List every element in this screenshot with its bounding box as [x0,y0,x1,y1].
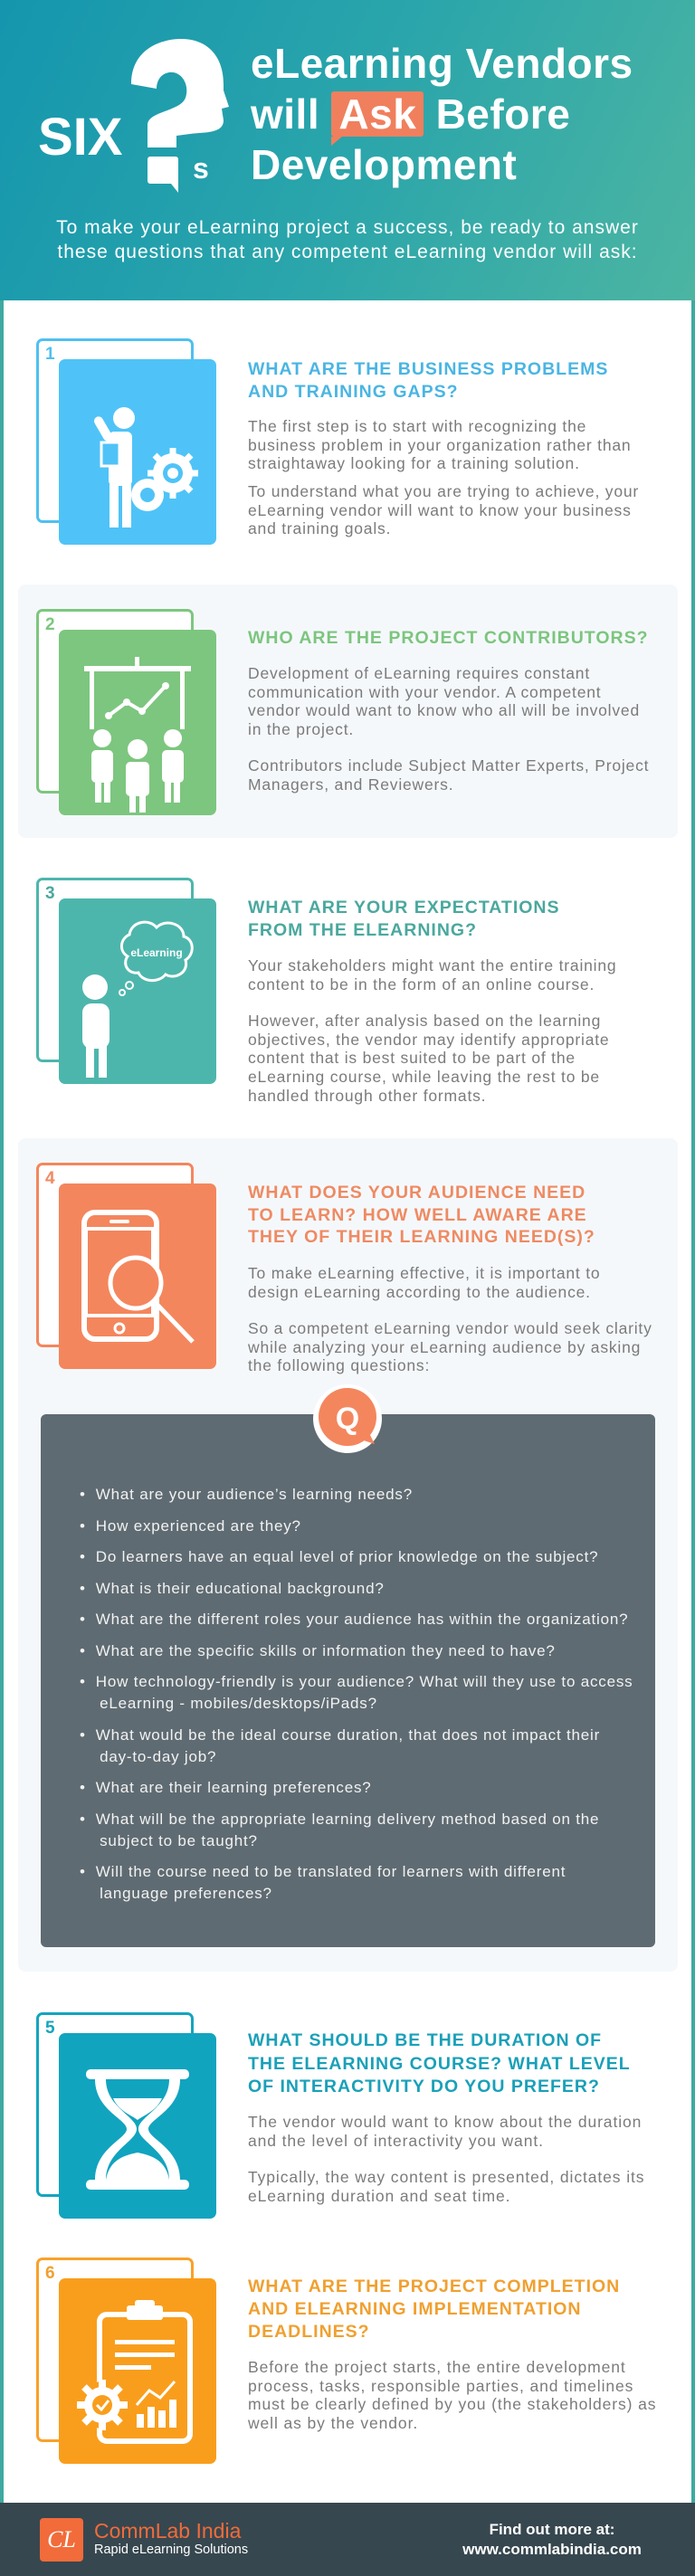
subtitle: these questions that any competent eLearning vendor will ask: [57,242,638,262]
body 2: Contributors include Subject Matter Experts, Project [248,756,649,775]
icon: person with gears [59,359,216,545]
heading 6: AND ELEARNING IMPLEMENTATION [248,2299,582,2319]
question list: day-to-day job? [100,1748,216,1764]
title text: Ask [338,90,416,138]
brand name: CommLab India [94,2519,241,2543]
panel: section 5 [36,2012,644,2219]
heading 3: WHAT ARE YOUR EXPECTATIONS [248,898,560,917]
question list: • What is their educational background? [80,1580,385,1596]
logo: CL: CL [47,2526,76,2552]
body 2: Managers, and Reviewers. [248,775,453,794]
heading 1: AND TRAINING GAPS? [248,382,458,402]
heading 6: DEADLINES? [248,2322,370,2342]
body 4: design eLearning according to the audience. [248,1283,591,1301]
heading 6: WHAT ARE THE PROJECT COMPLETION [248,2277,620,2296]
card outline 5 [36,2012,194,2197]
body 4: while analyzing your eLearning audience by asking [248,1338,641,1356]
body 3: eLearning course, while leaving the rest to be [248,1068,600,1086]
question list: • Will the course need to be translated for learners with different [80,1863,566,1880]
question list: language preferences? [100,1885,272,1902]
heading 3 [248,898,560,939]
body 3: objectives, the vendor may identify appropriate [248,1031,609,1049]
question list: • What are the specific skills or information they need to have? [80,1641,556,1659]
body 5: and the level of interactivity you want. [248,2132,544,2150]
body 2: communication with your vendor. A competent [248,683,601,701]
body 1: business problem in your organization rather than [248,436,631,454]
icon: thinking person with eLearning cloud [59,898,216,1084]
card outline 4 [36,1163,194,1347]
question list: • Do learners have an equal level of prior knowledge on the subject? [80,1548,598,1565]
heading 3: FROM THE ELEARNING? [248,919,477,939]
find out more: Find out more at: [490,2521,614,2538]
question list [80,1486,633,1902]
subtitle [56,217,639,262]
body 4 [248,1264,652,1374]
body 6: process, tasks, responsible parties, and timelines [248,2377,633,2395]
body 2 [248,664,649,794]
title text: Development [251,141,517,188]
body 5 [248,2113,644,2205]
body 2: in the project. [248,720,354,738]
icon: hourglass [59,2033,216,2219]
body 4: So a competent eLearning vendor would seek clarity [248,1319,652,1337]
title text: eLearning Vendors [251,40,633,87]
title: s: s [193,152,209,185]
card outline 6: 6 [45,2264,55,2283]
body 2: Development of eLearning requires constant [248,664,590,682]
heading 2: WHO ARE THE PROJECT CONTRIBUTORS? [248,628,649,648]
body 2: vendor would want to know who all will be involved [248,701,640,719]
heading 1 [248,359,608,402]
icon: phone with magnifier [59,1183,216,1369]
panel: section 6 [36,2258,656,2464]
question list: • What would be the ideal course duration, that does not impact their [80,1726,600,1743]
body 1: and training goals. [248,519,391,537]
panel: section 2 [18,585,678,838]
body 6: Before the project starts, the entire development [248,2358,626,2376]
heading 6 [248,2277,620,2342]
question list: • How experienced are they? [80,1516,301,1535]
panel: section 3 [36,878,616,1105]
footer [0,2503,695,2576]
body 6: must be clearly defined by you (the stakeholders) as [248,2395,656,2413]
icon: team with chart board [59,630,216,815]
find out more [462,2521,642,2558]
panel: section 4 [18,1138,678,1972]
question list: • What will be the appropriate learning delivery method based on the [80,1810,599,1828]
heading 5: WHAT SHOULD BE THE DURATION OF [248,2030,602,2050]
card outline 6 [36,2258,194,2442]
body 3: content to be in the form of an online course. [248,975,595,993]
card outline 5: 5 [45,2019,55,2038]
card outline 2: 2 [45,615,55,634]
find out more: www.commlabindia.com [462,2541,642,2558]
heading 4 [248,1183,595,1247]
heading 1: WHAT ARE THE BUSINESS PROBLEMS [248,359,608,379]
body 3: content that is best suited to be part of the [248,1049,576,1067]
logo: CL [40,2518,83,2562]
icon: Q bubble [313,1384,382,1453]
card outline 1: 1 [45,345,55,364]
icon: Q bubble: Q [336,1402,359,1436]
heading 5: OF INTERACTIVITY DO YOU PREFER? [248,2077,600,2096]
question list: • What are the different roles your audience has within the organization? [80,1611,628,1628]
title: SIX: SIX [38,108,123,166]
body 1: straightaway looking for a training solution. [248,454,580,472]
body 1 [248,417,639,537]
question list: eLearning - mobiles/desktops/iPads? [100,1695,377,1712]
subtitle: To make your eLearning project a success, be ready to answer [56,217,639,238]
body 5: The vendor would want to know about the duration [248,2113,642,2131]
icon: clipboard with gear and chart [59,2278,216,2464]
card outline 3 [36,878,194,1062]
body 1: The first step is to start with recognizing the [248,417,586,435]
icon: thinking person with eLearning cloud: eLearning [130,946,183,959]
body 1: To understand what you are trying to achieve, your [248,482,639,500]
body 3 [248,956,616,1105]
header banner [0,0,695,300]
card outline 3: 3 [45,884,55,903]
question list: • What are your audience’s learning needs? [80,1486,413,1503]
card outline 4: 4 [45,1169,55,1188]
question list: subject to be taught? [100,1831,258,1849]
icon: question mark head [131,39,229,193]
question box [41,1414,655,1947]
body 3: handled through other formats. [248,1087,486,1105]
heading 5: THE ELEARNING COURSE? WHAT LEVEL [248,2054,631,2074]
body 6: well as by the vendor. [248,2414,418,2432]
body 3: Your stakeholders might want the entire training [248,956,616,974]
body 3: However, after analysis based on the learning [248,1012,601,1030]
body 5: eLearning duration and seat time. [248,2187,510,2205]
title text: will Before [251,90,570,138]
heading 5 [248,2030,631,2096]
title text [250,40,633,188]
body 4: the following questions: [248,1356,430,1374]
question list: • How technology-friendly is your audience? What will they use to access [80,1673,633,1690]
body 4: To make eLearning effective, it is important to [248,1264,600,1282]
body 6 [248,2358,656,2432]
body 5: Typically, the way content is presented, dictates its [248,2168,644,2186]
heading 4: THEY OF THEIR LEARNING NEED(S)? [248,1227,595,1247]
body 1: eLearning vendor will want to know your business [248,501,632,519]
tagline: Rapid eLearning Solutions [94,2543,248,2557]
panel: section 1 [36,338,639,545]
heading 4: TO LEARN? HOW WELL AWARE ARE [248,1205,587,1225]
heading 4: WHAT DOES YOUR AUDIENCE NEED [248,1183,586,1202]
card outline 2 [36,609,194,794]
question list: • What are their learning preferences? [80,1779,372,1796]
card outline 1 [36,338,194,523]
